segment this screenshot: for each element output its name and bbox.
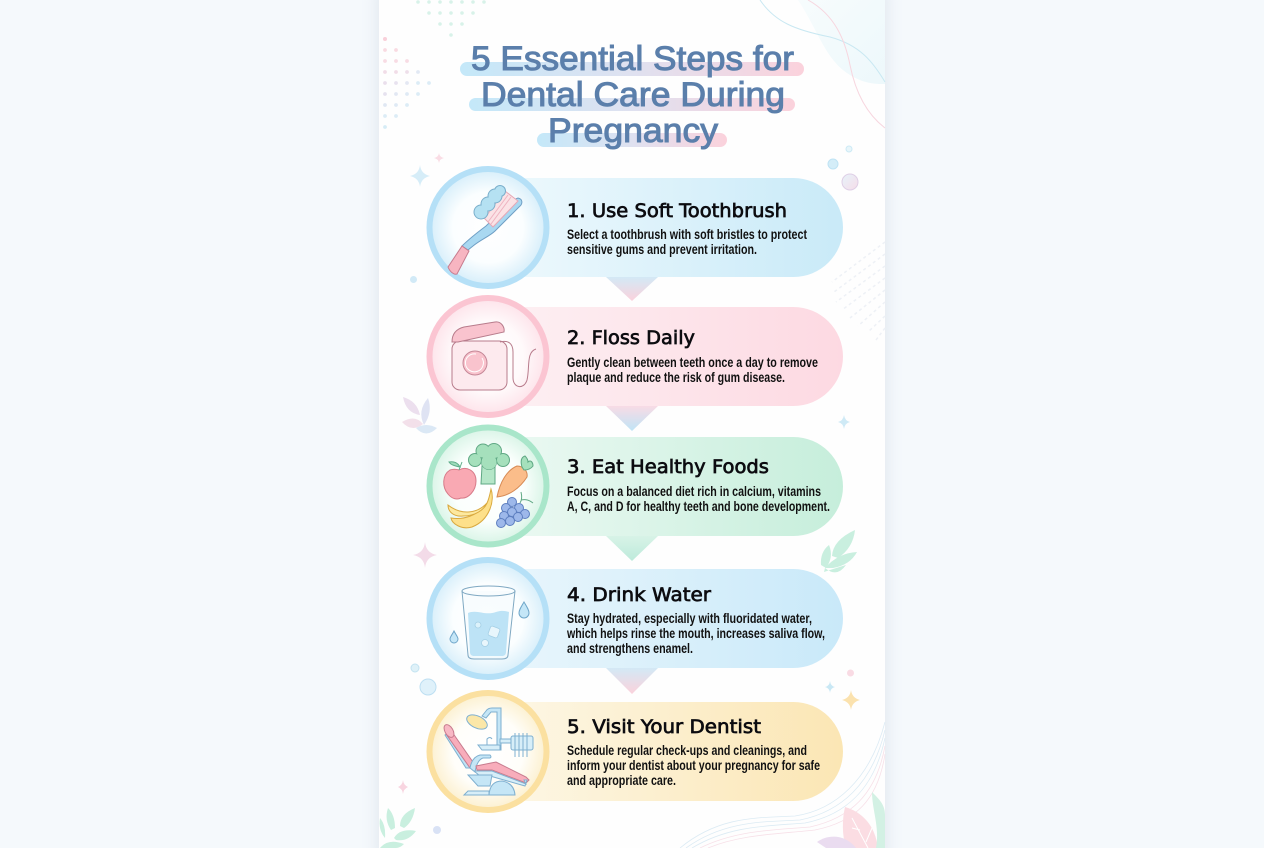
step 2 pill	[500, 307, 843, 406]
step 3 heading: 3. Eat Healthy Foods	[567, 456, 769, 478]
step 2 pointer arrow	[606, 406, 658, 431]
step 4 pointer arrow	[606, 668, 658, 694]
icon: toothbrush	[448, 185, 522, 274]
banana	[451, 489, 492, 528]
title text: Dental Care During	[481, 76, 785, 114]
toothpaste	[474, 185, 506, 220]
step 2 description: Gently clean between teeth once a day to remove	[567, 354, 818, 370]
broccoli	[468, 443, 510, 484]
decoration: green leaf sprig	[821, 530, 857, 572]
step 5 heading: 5. Visit Your Dentist	[567, 716, 761, 738]
decoration: bottom right waves and leaves	[680, 722, 885, 848]
icon: dental chair	[442, 708, 533, 795]
step 1 description	[567, 226, 807, 257]
step 1 heading: 1. Use Soft Toothbrush	[567, 200, 787, 222]
decoration: top dot grid	[416, 0, 486, 37]
icon: glass of water	[450, 586, 529, 659]
step 4 description: and strengthens enamel.	[567, 640, 693, 656]
apple	[444, 468, 476, 499]
title	[460, 40, 804, 150]
step 5 description: inform your dentist about your pregnancy for safe	[567, 757, 820, 773]
step 1 pill	[500, 178, 843, 277]
tool tray	[500, 733, 533, 757]
step 3 description	[567, 483, 830, 514]
step 1 description: sensitive gums and prevent irritation.	[567, 241, 757, 257]
step 1 badge	[430, 169, 546, 286]
title highlight bars	[460, 62, 804, 147]
step 1 pointer arrow	[606, 277, 658, 301]
title text: Pregnancy	[548, 112, 718, 150]
spittoon	[478, 745, 500, 750]
title text: 5 Essential Steps for	[471, 40, 794, 78]
panel shadow	[375, 0, 889, 848]
decoration: lilac leaf sprig	[402, 397, 437, 434]
decoration: left dot grid	[383, 37, 431, 129]
step 4 description: Stay hydrated, especially with fluoridated water,	[567, 610, 812, 626]
step 5	[430, 693, 843, 810]
step 3 badge	[430, 428, 546, 544]
step 5 pill	[500, 702, 843, 801]
step 2 description: plaque and reduce the risk of gum disease.	[567, 369, 785, 385]
step 3	[430, 428, 843, 561]
step 1	[430, 169, 843, 301]
decoration: sparkles and bubbles	[398, 146, 860, 834]
step 4 heading: 4. Drink Water	[567, 584, 711, 606]
armrest	[470, 755, 491, 772]
step 3 pill	[500, 437, 843, 536]
base	[468, 775, 492, 786]
seat	[476, 762, 529, 783]
step 3 description: Focus on a balanced diet rich in calcium, vitamins	[567, 483, 821, 499]
main panel	[379, 0, 885, 848]
step 2 badge	[430, 298, 546, 415]
step 2	[430, 298, 843, 431]
icon: floss box	[452, 322, 536, 390]
step 3 pointer arrow	[606, 536, 658, 561]
step 4 description: which helps rinse the mouth, increases saliva flow,	[566, 625, 825, 641]
title text	[471, 40, 794, 150]
step 5 description	[567, 742, 820, 788]
step 5 description: and appropriate care.	[567, 772, 676, 788]
carrot	[497, 466, 527, 497]
lamp	[464, 712, 490, 732]
step 5 badge	[430, 693, 546, 810]
chair back	[445, 731, 472, 768]
decoration: top right corner wave	[760, 0, 885, 128]
decoration: right halftone pattern	[832, 242, 885, 340]
decoration: bottom left leaf sprig	[380, 808, 416, 848]
icon: healthy foods	[444, 443, 533, 528]
step 4	[430, 560, 843, 694]
step 4 description	[566, 610, 825, 656]
step 4 pill	[500, 569, 843, 668]
step 3 description: A, C, and D for healthy teeth and bone development.	[567, 498, 830, 514]
step 2 description	[567, 354, 818, 385]
step 5 description: Schedule regular check-ups and cleanings, and	[567, 742, 807, 758]
step 1 description: Select a toothbrush with soft bristles to protect	[567, 226, 807, 242]
lamp arm	[482, 708, 501, 750]
step 4 badge	[430, 560, 546, 677]
step 2 heading: 2. Floss Daily	[567, 327, 695, 349]
grapes	[496, 498, 530, 528]
